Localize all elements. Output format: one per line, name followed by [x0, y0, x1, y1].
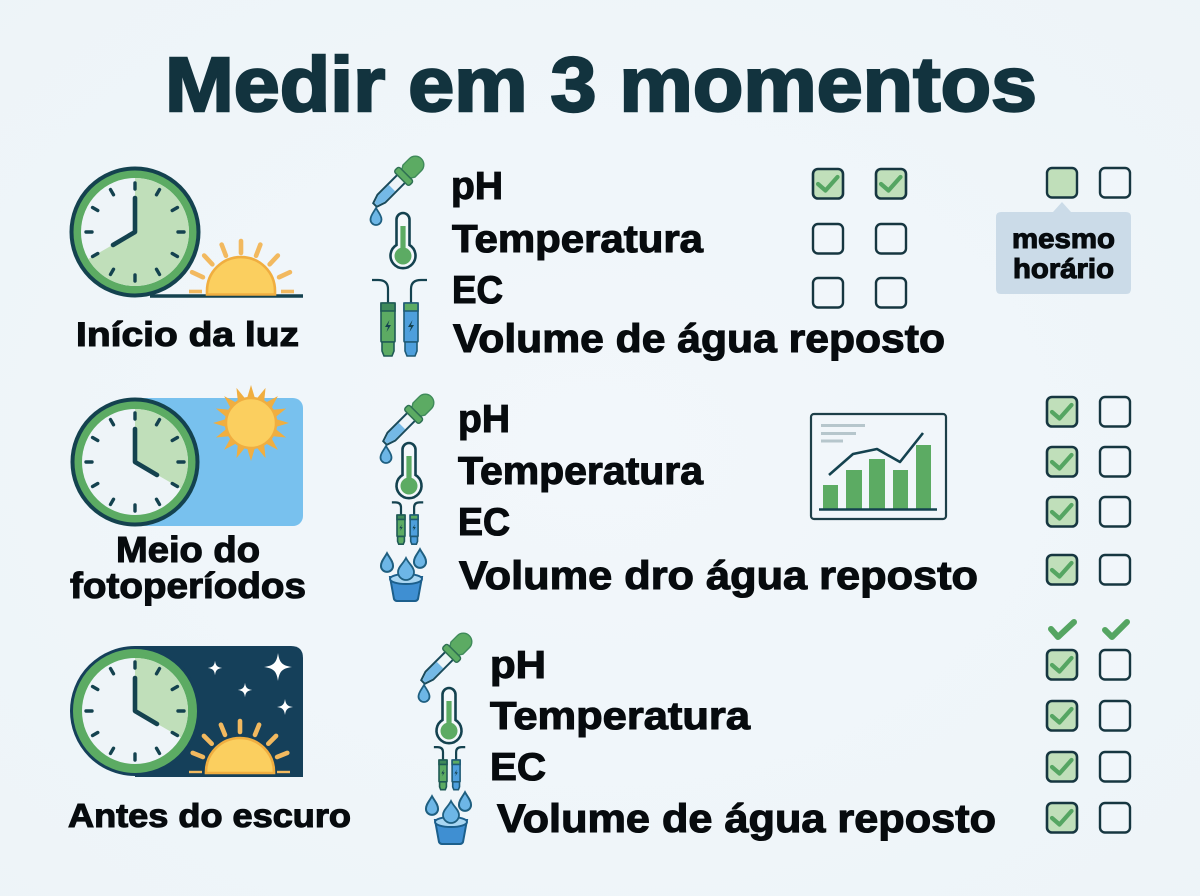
- icon: clock before dark: [72, 648, 198, 774]
- label: início da luz: Início da luz: [76, 316, 299, 354]
- checkboxes: início da luz: [813, 168, 1130, 308]
- icon: EC probes: [392, 502, 423, 544]
- text: pH: pH: [458, 398, 510, 441]
- icon: clock at midday: [72, 400, 198, 524]
- panel: antes do escuro: [68, 646, 351, 834]
- text: Volume de água reposto: Volume de água reposto: [497, 797, 996, 841]
- text: pH: pH: [451, 165, 503, 208]
- text: Temperatura: Temperatura: [490, 695, 750, 738]
- list: início da luz: [368, 151, 945, 361]
- text: EC: EC: [452, 269, 503, 312]
- text: EC: EC: [458, 501, 510, 544]
- text: Temperatura: Temperatura: [458, 450, 703, 493]
- icon: pipette: [368, 151, 429, 225]
- icon: EC probes: [434, 747, 465, 790]
- text: Volume de água reposto: Volume de água reposto: [453, 317, 945, 361]
- callout: mesmo horário: mesmo: [1012, 223, 1115, 254]
- text: Volume dro água reposto: Volume dro água reposto: [459, 554, 978, 598]
- icon: thermometer: [436, 688, 462, 743]
- icon: night sky with setting sun: [135, 646, 303, 777]
- label: antes do escuro: Antes do escuro: [68, 797, 351, 834]
- text: pH: pH: [490, 644, 546, 687]
- icon: pipette: [416, 628, 477, 702]
- icon: water cup: [426, 792, 471, 844]
- icon: thermometer: [396, 443, 422, 498]
- title: Medir em 3 momentos: [165, 42, 1037, 128]
- label: meio do fotoperíodos: [70, 529, 306, 606]
- panel: meio do fotoperíodo: [70, 385, 306, 606]
- text: Temperatura: Temperatura: [452, 218, 703, 261]
- checkboxes: meio do fotoperíodo: [1047, 397, 1130, 584]
- icon: clock at start of light: [72, 168, 198, 296]
- list: meio do fotoperíodo: [378, 389, 978, 601]
- chart: bars with trend line: [811, 414, 946, 519]
- icon: water cup: [381, 549, 426, 601]
- label: meio do fotoperíodos: fotoperíodos: [70, 565, 306, 606]
- icon: sunrise: [150, 241, 303, 296]
- text: EC: EC: [490, 746, 546, 789]
- icon: pipette: [378, 389, 439, 463]
- icon: EC probes: [372, 280, 427, 356]
- panel: início da luz: [72, 168, 303, 354]
- callout: mesmo horário: [996, 202, 1131, 294]
- icon: daytime sky with sun: [135, 385, 303, 526]
- checkboxes: antes do escuro: [1047, 650, 1130, 832]
- callout: mesmo horário: horário: [1013, 253, 1114, 284]
- list: antes do escuro: [416, 628, 996, 844]
- label: meio do fotoperíodos: Meio do: [116, 529, 260, 570]
- icon: thermometer: [390, 213, 416, 268]
- checkmarks above columns: [1051, 622, 1127, 637]
